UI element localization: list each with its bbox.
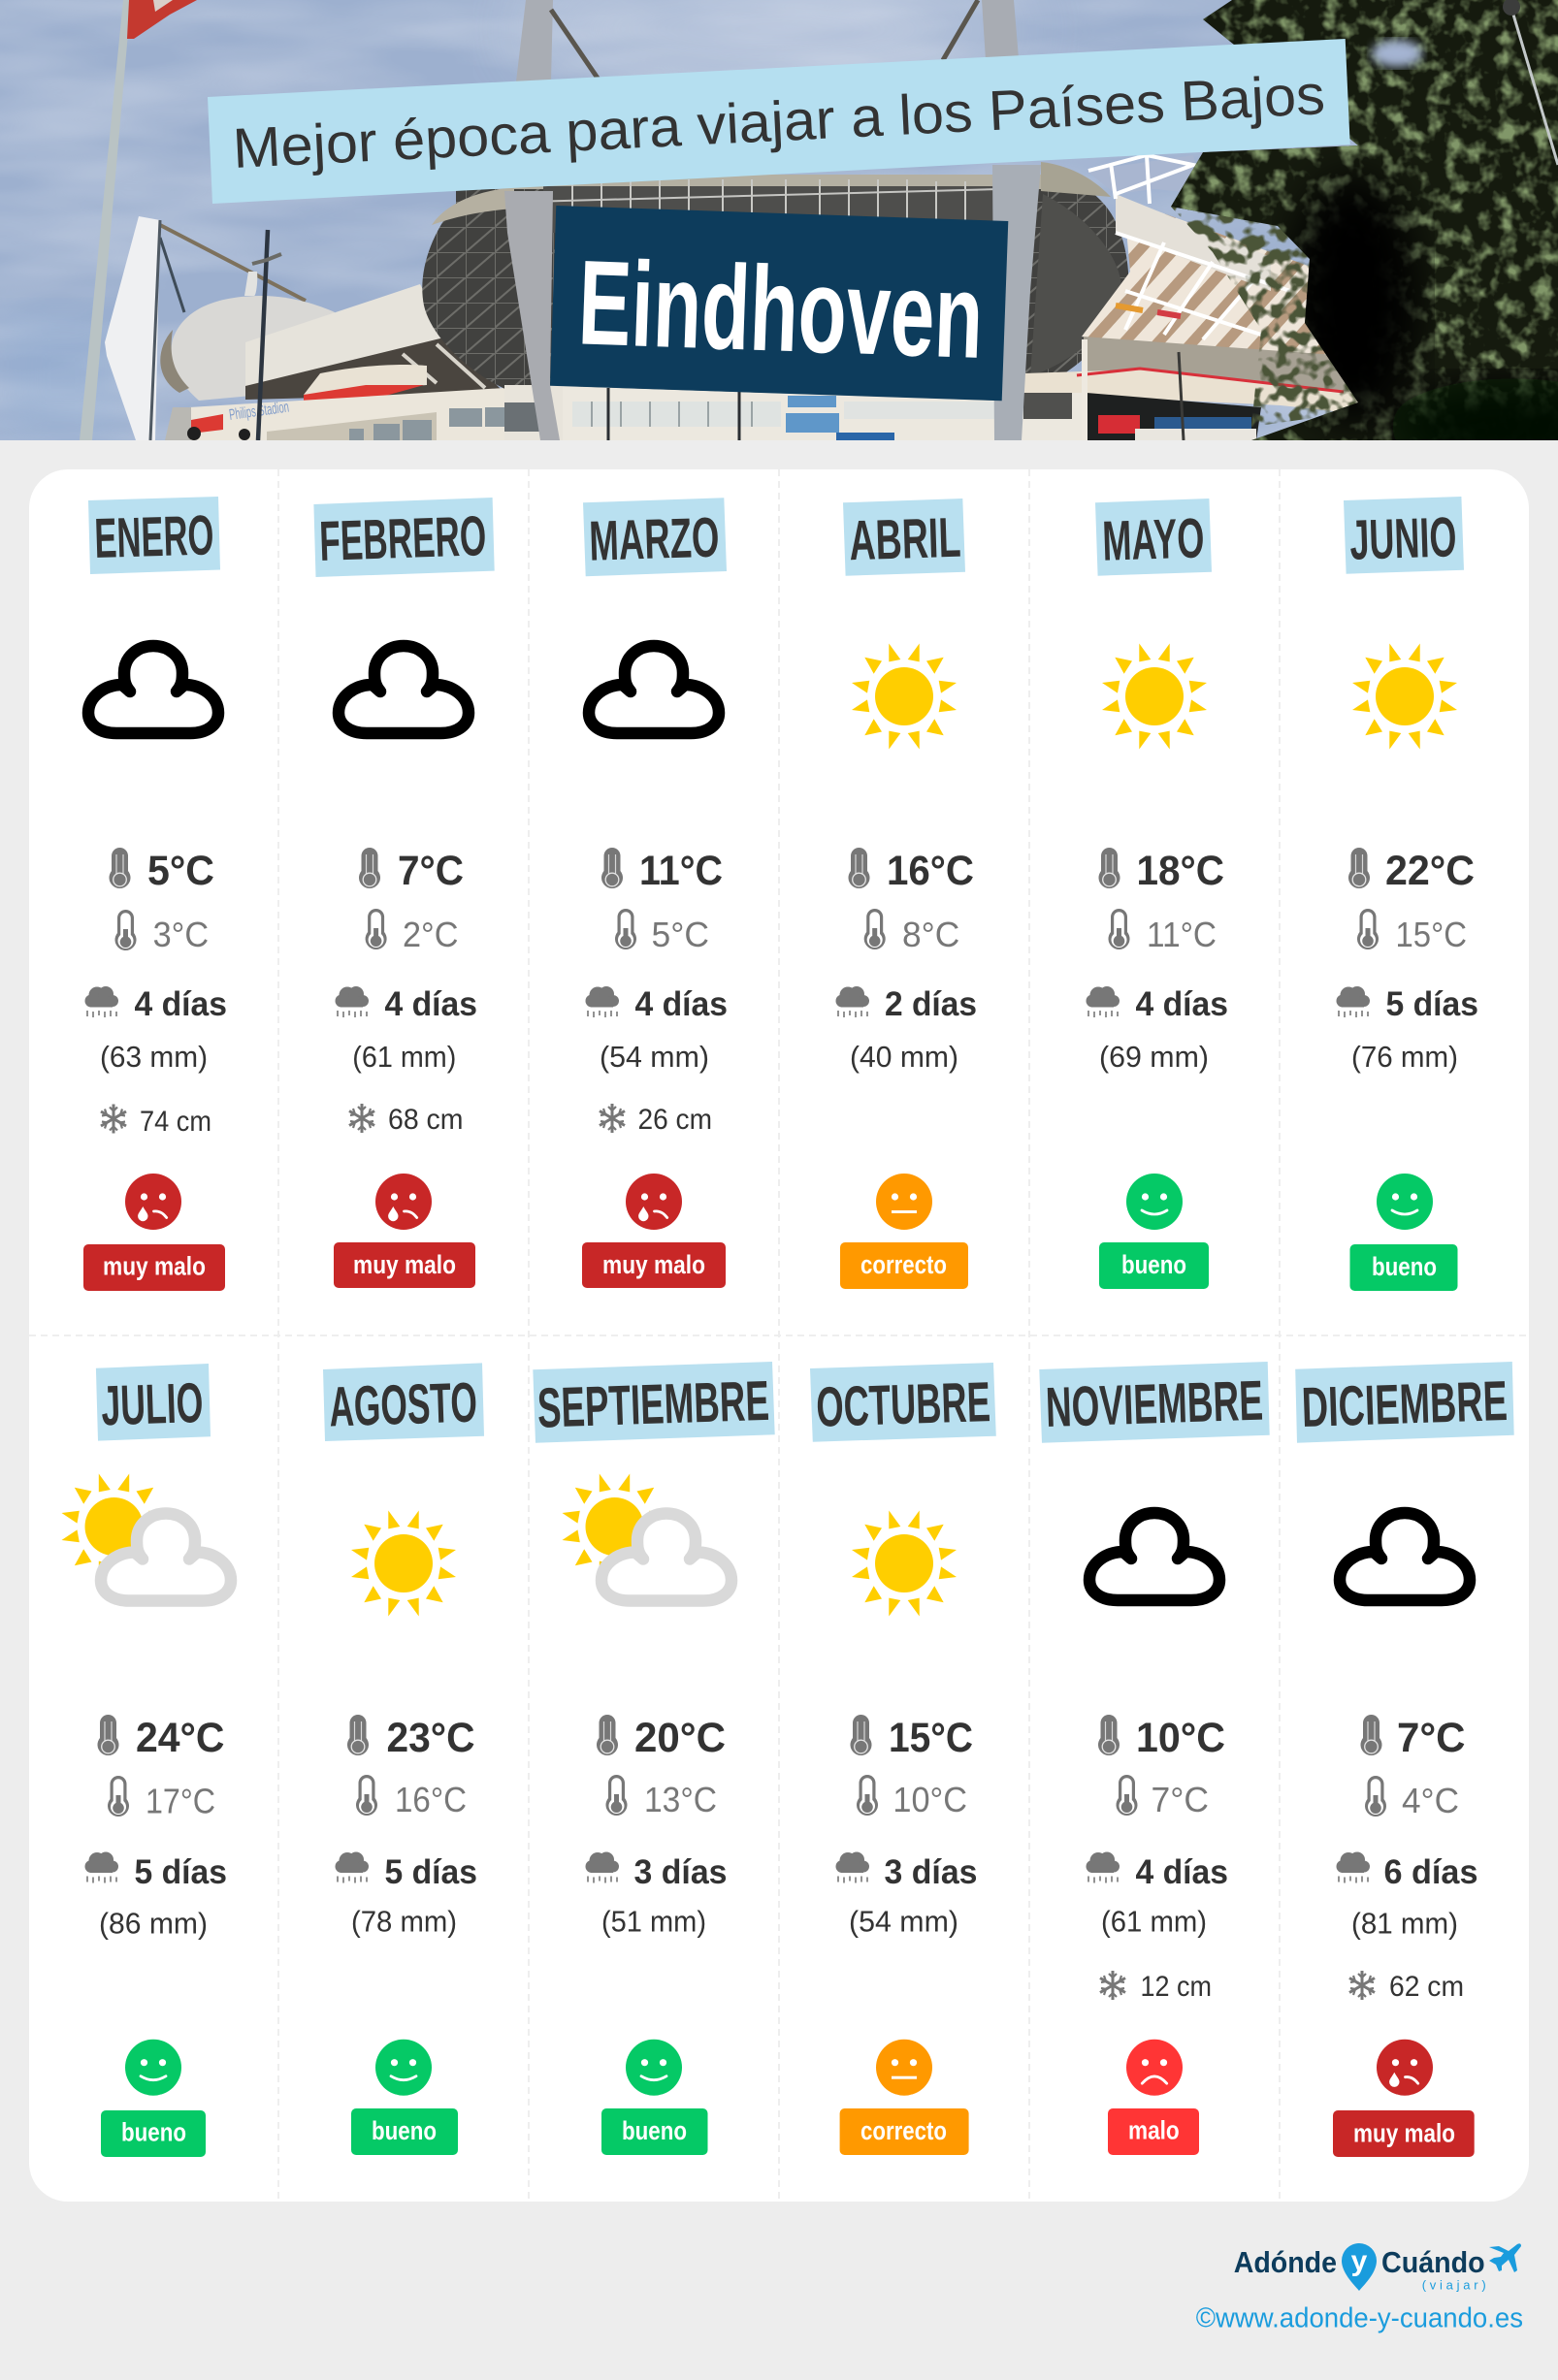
header photo: stadium: Philips Stadion <box>228 399 290 424</box>
snow <box>1100 1971 1212 2003</box>
label: agosto: AGOSTO <box>328 1370 478 1438</box>
max temperature: 23°C <box>386 1715 475 1761</box>
rainy days: 6 días <box>1383 1853 1478 1891</box>
rating face <box>375 1174 432 1230</box>
snow: 12 cm <box>1141 1971 1212 2003</box>
label: junio: JUNIO <box>1348 505 1457 572</box>
rainy days <box>336 985 477 1023</box>
max temperature: 10°C <box>1136 1715 1225 1761</box>
label: abril: ABRIL <box>848 506 961 572</box>
rating face <box>125 2040 181 2096</box>
rainy days: 5 días <box>384 1853 477 1891</box>
max temperature <box>359 848 464 894</box>
month: junio <box>1337 497 1478 1291</box>
rating badge: correcto <box>860 1250 947 1279</box>
label: marzo: MARZO <box>588 506 720 573</box>
max temperature <box>850 1715 973 1761</box>
max temperature: 15°C <box>889 1715 973 1761</box>
rainy days <box>836 1852 978 1891</box>
min temperature <box>615 909 709 954</box>
icon: sun <box>351 1511 456 1616</box>
label: abril <box>843 499 965 576</box>
rainfall: (86 mm) <box>99 1907 208 1941</box>
icon: cloud <box>1089 1513 1219 1600</box>
rainy days: 5 días <box>134 1853 227 1891</box>
title ribbon <box>208 39 1350 204</box>
month: enero <box>83 497 227 1291</box>
rainfall: (54 mm) <box>849 1905 958 1938</box>
rating badge: muy malo <box>602 1250 705 1279</box>
rating face <box>1126 1174 1183 1230</box>
label: noviembre: NOVIEMBRE <box>1045 1369 1264 1439</box>
min temperature <box>1357 909 1467 954</box>
rainfall: (61 mm) <box>352 1040 456 1074</box>
icon: sun and cloud <box>563 1474 731 1600</box>
label: julio: JULIO <box>100 1371 204 1437</box>
min temperature <box>605 1775 717 1819</box>
city name box: Eindhoven <box>576 236 986 384</box>
month: febrero <box>313 498 495 1288</box>
rainy days <box>586 985 728 1023</box>
rating badge <box>334 1242 475 1288</box>
rainy days <box>1087 985 1228 1023</box>
min temperature: 5°C <box>652 915 709 954</box>
min temperature: 4°C <box>1402 1781 1459 1820</box>
rainy days: 4 días <box>384 985 477 1023</box>
rating badge <box>1333 2110 1475 2157</box>
max temperature: 22°C <box>1385 848 1475 894</box>
month: marzo <box>582 498 728 1288</box>
label: mayo <box>1095 499 1212 576</box>
min temperature <box>864 909 959 954</box>
max temperature <box>109 848 214 894</box>
snow <box>1349 1971 1464 2003</box>
month: noviembre <box>1039 1362 1270 2155</box>
rainfall: (40 mm) <box>850 1040 958 1074</box>
min temperature: 2°C <box>403 915 458 954</box>
rating badge: bueno <box>121 2118 186 2147</box>
rating badge <box>601 2108 708 2155</box>
label: enero <box>88 497 220 574</box>
max temperature: 24°C <box>136 1715 225 1761</box>
label: marzo <box>583 498 727 576</box>
logo: Adónde y Cuándo: y <box>1351 2245 1368 2277</box>
logo: Adónde y Cuándo: Cuándo <box>1381 2245 1485 2279</box>
icon: cloud <box>1340 1513 1470 1600</box>
month: septiembre <box>533 1362 775 2155</box>
title ribbon: Mejor época para viajar a los Países Bajos <box>231 63 1326 180</box>
city name box <box>550 206 1008 401</box>
min temperature <box>857 1775 967 1819</box>
rating badge <box>351 2108 458 2155</box>
month: octubre <box>810 1363 996 2155</box>
label: octubre: OCTUBRE <box>815 1370 991 1439</box>
max temperature <box>1098 1715 1225 1761</box>
min temperature: 16°C <box>395 1780 467 1819</box>
icon: sun <box>1352 644 1457 749</box>
label: agosto <box>323 1363 484 1441</box>
rating face <box>876 2040 932 2096</box>
max temperature <box>1360 1715 1465 1761</box>
snow: 68 cm <box>388 1104 464 1136</box>
snow <box>101 1104 211 1138</box>
icon: sun <box>852 1511 957 1616</box>
min temperature: 10°C <box>893 1780 967 1819</box>
rating badge <box>840 1242 968 1289</box>
rainfall: (54 mm) <box>600 1040 709 1074</box>
rating badge: muy malo <box>1353 2118 1455 2147</box>
label: noviembre <box>1039 1362 1270 1443</box>
month: julio <box>62 1364 231 2157</box>
rating badge <box>840 2108 969 2155</box>
website credit: ©www.adonde-y-cuando.es <box>1196 2302 1523 2333</box>
max temperature <box>97 1715 225 1761</box>
rainy days <box>1087 1852 1228 1891</box>
rainy days: 4 días <box>1135 1853 1228 1891</box>
rainfall: (69 mm) <box>1099 1040 1209 1074</box>
min temperature <box>108 1776 215 1821</box>
rainy days: 4 días <box>134 985 227 1023</box>
label: octubre <box>810 1363 996 1442</box>
rating badge: muy malo <box>353 1250 456 1279</box>
rating badge: bueno <box>1121 1250 1186 1279</box>
rating badge <box>1108 2108 1199 2155</box>
min temperature <box>366 909 458 954</box>
max temperature <box>597 1715 726 1761</box>
snow: 74 cm <box>140 1106 211 1138</box>
rating face <box>1377 2040 1433 2096</box>
rating badge <box>101 2110 206 2157</box>
label: julio <box>96 1364 211 1441</box>
min temperature: 7°C <box>1151 1780 1209 1819</box>
rating face <box>876 1174 932 1230</box>
rating face <box>1377 1174 1433 1230</box>
rating badge: muy malo <box>103 1251 206 1280</box>
min temperature: 11°C <box>1147 915 1217 954</box>
rainfall: (63 mm) <box>100 1040 208 1074</box>
header photo: stadium <box>0 0 1558 475</box>
max temperature: 20°C <box>634 1715 726 1761</box>
snow <box>600 1104 712 1136</box>
max temperature: 5°C <box>147 848 214 894</box>
month: mayo <box>1087 499 1228 1289</box>
max temperature <box>347 1715 475 1761</box>
rainfall: (61 mm) <box>1101 1905 1207 1938</box>
rating badge <box>1350 1244 1457 1291</box>
max temperature: 18°C <box>1137 848 1224 894</box>
min temperature <box>114 910 209 954</box>
label: mayo: MAYO <box>1101 506 1205 573</box>
rainfall: (76 mm) <box>1351 1040 1458 1074</box>
max temperature: 7°C <box>1397 1715 1465 1761</box>
rating badge: correcto <box>860 2116 947 2145</box>
rainy days <box>1337 1852 1478 1891</box>
label: enero: ENERO <box>93 503 214 570</box>
rainy days <box>336 1852 477 1891</box>
rainy days: 4 días <box>634 985 728 1023</box>
min temperature: 15°C <box>1395 915 1467 954</box>
rainy days: 3 días <box>885 1853 978 1891</box>
rainfall: (51 mm) <box>601 1905 706 1938</box>
rating badge <box>83 1244 225 1291</box>
min temperature: 13°C <box>644 1780 717 1819</box>
icon: sun <box>852 644 957 749</box>
rating badge: malo <box>1128 2116 1180 2145</box>
logo: Adónde y Cuándo: Adónde <box>1234 2245 1337 2279</box>
label: septiembre <box>533 1362 775 1443</box>
rainy days <box>85 1852 227 1891</box>
icon: cloud <box>88 646 218 733</box>
rating face <box>375 2040 432 2096</box>
rating face <box>125 1174 181 1230</box>
min temperature: 8°C <box>902 915 959 954</box>
rainy days: 5 días <box>1385 985 1478 1023</box>
month: agosto <box>323 1363 484 2155</box>
month: diciembre <box>1295 1362 1514 2157</box>
rating badge <box>1099 1242 1209 1289</box>
icon: cloud <box>589 646 719 733</box>
rating badge: bueno <box>1372 1252 1437 1281</box>
max temperature <box>848 848 974 894</box>
min temperature <box>1108 909 1217 954</box>
min temperature <box>1365 1776 1459 1820</box>
rainy days <box>586 1852 728 1891</box>
logo: Adónde y Cuándo <box>1234 2243 1521 2293</box>
max temperature <box>1348 848 1475 894</box>
max temperature <box>1098 848 1224 894</box>
rating badge: bueno <box>372 2116 437 2145</box>
rainy days <box>1337 985 1478 1023</box>
snow: 62 cm <box>1389 1971 1464 2003</box>
max temperature: 16°C <box>887 848 974 894</box>
label: febrero: FEBRERO <box>318 504 487 573</box>
rating face <box>626 2040 682 2096</box>
rainfall: (81 mm) <box>1351 1907 1458 1941</box>
rating badge <box>582 1242 726 1288</box>
min temperature <box>356 1775 467 1819</box>
icon: cloud <box>339 646 469 733</box>
month: abril <box>836 499 977 1289</box>
min temperature: 3°C <box>153 915 209 954</box>
rainy days: 2 días <box>885 985 977 1023</box>
max temperature: 7°C <box>398 848 464 894</box>
rainy days <box>836 985 977 1023</box>
min temperature: 17°C <box>146 1781 215 1821</box>
icon: sun and cloud <box>62 1474 231 1600</box>
label: febrero <box>313 498 495 577</box>
rainfall: (78 mm) <box>351 1905 457 1938</box>
panel: months card <box>29 469 1529 2202</box>
snow <box>349 1104 464 1136</box>
rating badge: bueno <box>622 2116 687 2145</box>
logo: Adónde y Cuándo: (viajar) <box>1422 2278 1486 2293</box>
min temperature <box>1116 1775 1209 1819</box>
rainy days <box>85 985 227 1023</box>
rating face <box>626 1174 682 1230</box>
label: junio <box>1344 497 1464 574</box>
label: septiembre: SEPTIEMBRE <box>536 1369 770 1440</box>
rainy days: 3 días <box>634 1853 728 1891</box>
rainy days: 4 días <box>1135 985 1228 1023</box>
icon: sun <box>1102 644 1207 749</box>
max temperature <box>601 848 723 894</box>
max temperature: 11°C <box>639 848 723 894</box>
rating face <box>1126 2040 1183 2096</box>
snow: 26 cm <box>638 1104 712 1136</box>
